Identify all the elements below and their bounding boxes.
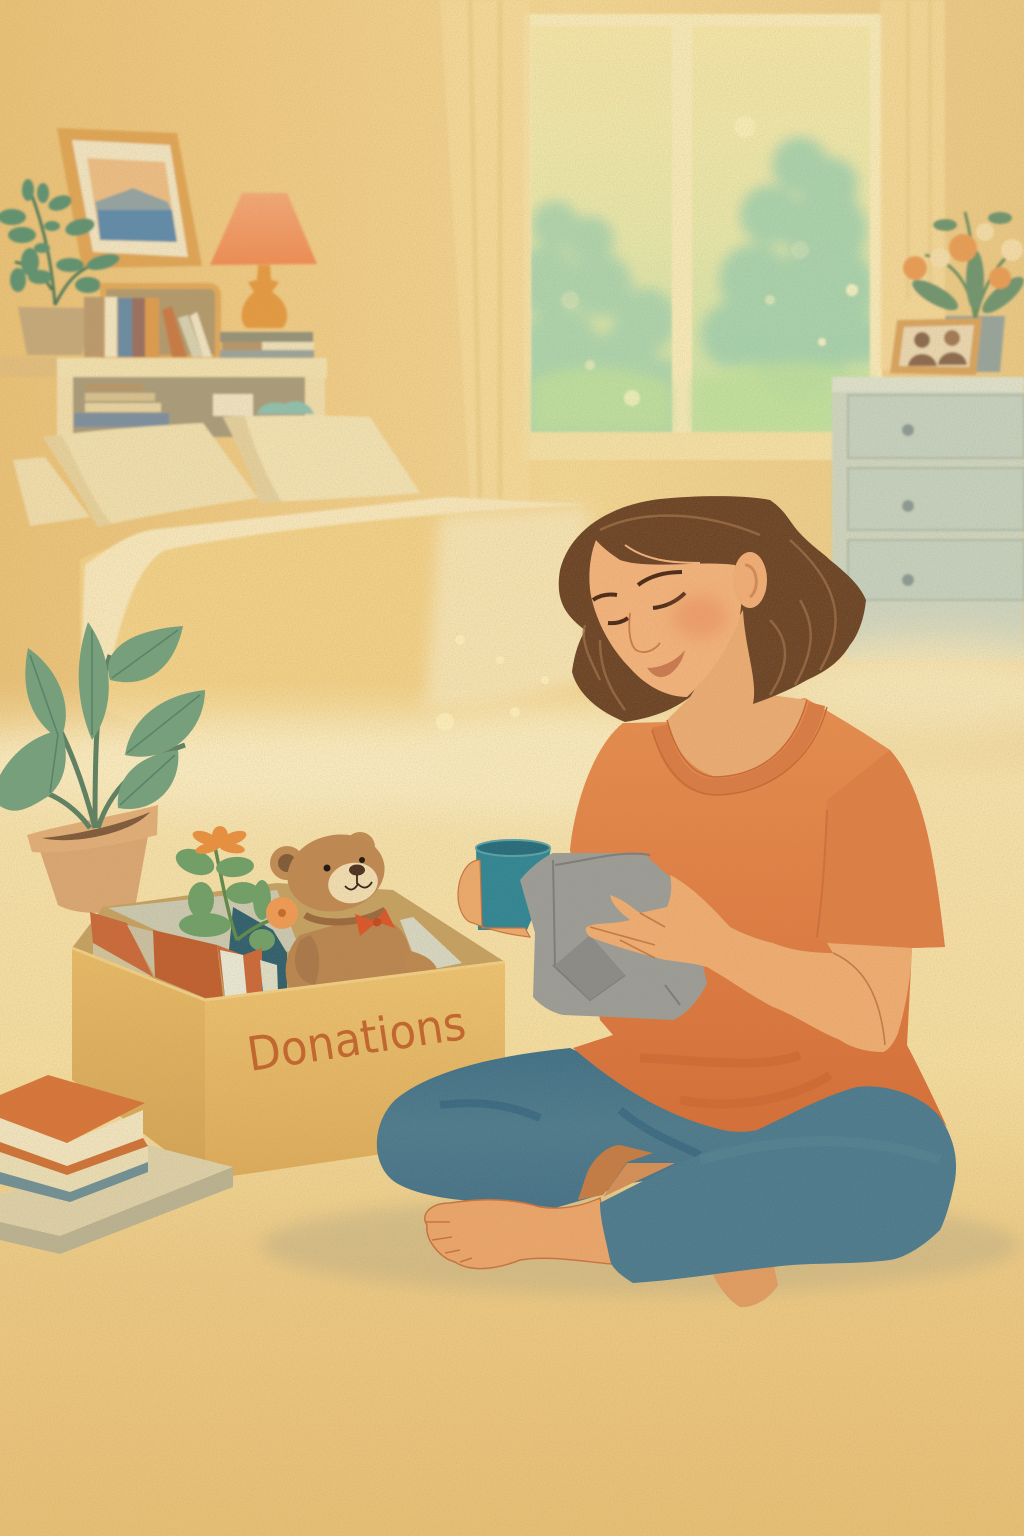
donations box (72, 826, 505, 1180)
forearm and hand (586, 875, 912, 1052)
finger lines (590, 913, 885, 1045)
books in box (90, 912, 278, 998)
curtains (440, 0, 945, 500)
floor shadow (260, 1195, 1020, 1295)
floating light specks (436, 635, 549, 731)
small flower plant (172, 826, 298, 951)
sleeve (817, 750, 943, 948)
box rim (72, 948, 505, 1000)
teddy bear (270, 826, 437, 990)
collar (660, 704, 817, 787)
picture frame (57, 128, 202, 268)
near leg jeans (600, 1086, 956, 1283)
window (511, 14, 884, 460)
box front panel (205, 962, 505, 1180)
window left pane (531, 26, 672, 432)
cloth in hands (520, 853, 707, 1020)
window right pane (692, 26, 870, 432)
nose (629, 613, 660, 652)
right blanket light panel (425, 505, 590, 710)
lower foliage (531, 362, 870, 432)
trees right (696, 131, 870, 374)
hair back (559, 496, 866, 722)
trees left (530, 196, 672, 432)
flower vase (903, 212, 1024, 372)
photo frame on dresser (890, 318, 982, 375)
dark foliage behind plant (225, 907, 287, 992)
ankle (603, 1163, 675, 1197)
large potted plant (0, 622, 205, 913)
headboard shelf (0, 286, 327, 438)
box back interior (72, 883, 505, 1000)
back foot (713, 1262, 778, 1307)
neck (667, 610, 807, 777)
middle pillow (43, 423, 258, 527)
box side panel (72, 948, 205, 1180)
hem folds (640, 1055, 830, 1104)
shelf book stack (220, 332, 314, 359)
box label: Donations (244, 996, 469, 1083)
bed (13, 416, 590, 748)
cheek (672, 595, 728, 639)
front foot (425, 1198, 612, 1269)
t-shirt (570, 698, 947, 1132)
jeans creases (440, 1103, 700, 1155)
left hand (458, 860, 530, 937)
floor (0, 680, 1024, 1536)
sheet fold band (80, 497, 590, 715)
sock cuff (578, 1145, 653, 1200)
far left pillow (13, 457, 90, 526)
blurred background room (0, 0, 1024, 748)
window sparkles (561, 116, 858, 406)
blue mug (476, 840, 551, 930)
orange flower (191, 826, 248, 856)
blanket (80, 503, 590, 748)
hair strands (584, 516, 836, 710)
far leg jeans (377, 1048, 780, 1208)
stacked books on floor (0, 1075, 233, 1254)
ear (733, 552, 767, 608)
background wall (0, 0, 1024, 830)
plant on headboard (0, 179, 121, 355)
table lamp (210, 193, 317, 328)
toes (425, 1222, 472, 1262)
dresser (832, 377, 1024, 660)
cloth folds (553, 854, 680, 1005)
right pillow (223, 416, 420, 503)
eyes and brows (593, 572, 685, 623)
woman (377, 496, 956, 1307)
mist over lower bed (0, 640, 1024, 810)
face (589, 540, 741, 697)
shelf books (84, 297, 212, 357)
smile (647, 650, 685, 677)
